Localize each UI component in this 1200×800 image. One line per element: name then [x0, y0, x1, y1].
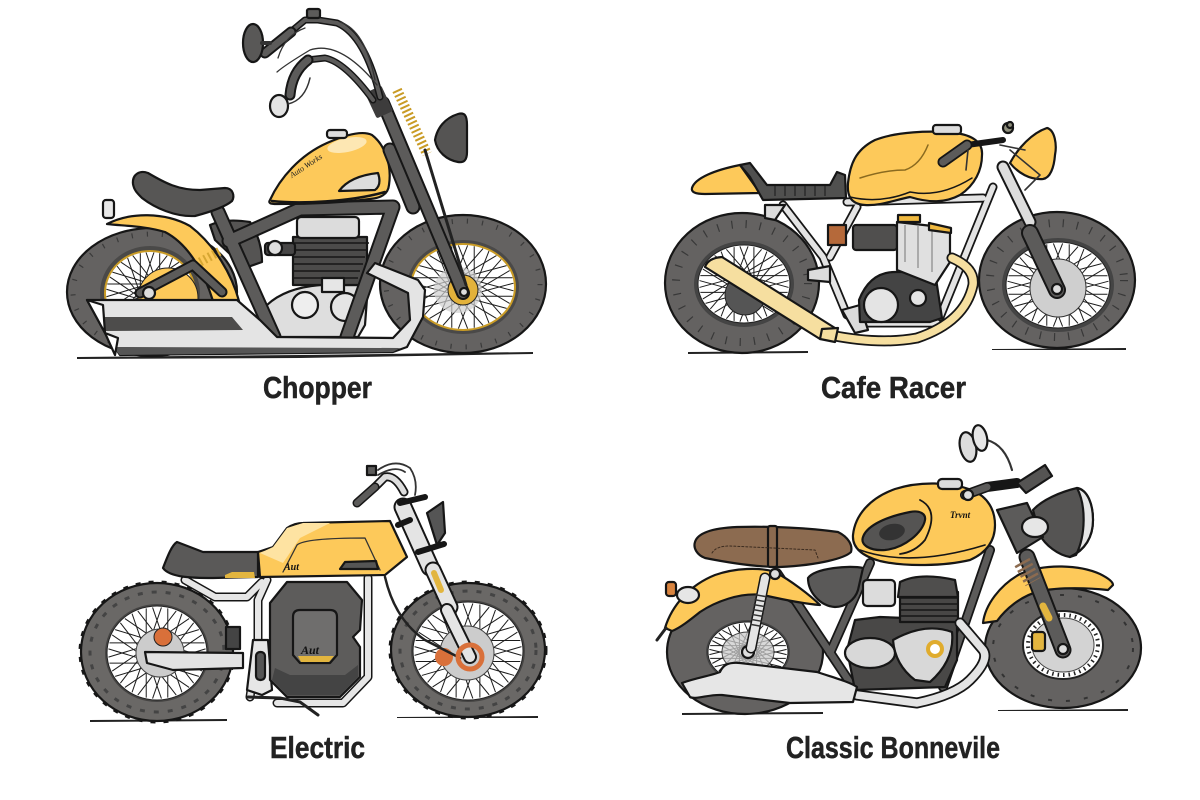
title: Electric: Electric: [270, 730, 365, 765]
front wheel: [985, 588, 1141, 708]
engine: [845, 576, 958, 690]
exhaust pipes: [87, 263, 425, 355]
handlebar: [357, 463, 416, 503]
seat: [163, 542, 258, 578]
tail light: [103, 200, 114, 218]
yellow tank: Aut: [283, 562, 300, 573]
front wheel: [390, 582, 546, 718]
front wheel: [380, 215, 546, 353]
rear wheel: [67, 228, 237, 356]
panel: electric motorcycle: [80, 463, 546, 722]
fuel tank: [853, 479, 995, 565]
tail lights: [657, 582, 699, 640]
engine: [265, 217, 369, 337]
rear fender: [107, 215, 239, 301]
front wheel: [979, 212, 1135, 348]
tail section: [692, 165, 760, 194]
frame: [777, 550, 990, 687]
swingarm and shock: [140, 250, 222, 299]
seat: [694, 526, 851, 567]
handlebars and mirrors: [243, 9, 380, 117]
frame: [218, 207, 393, 337]
rear wheel: [80, 582, 234, 722]
ground shadow: [90, 716, 538, 722]
panel: cafe racer motorcycle: [665, 122, 1135, 354]
ground shadow: [688, 348, 1126, 354]
cable: [385, 577, 460, 658]
yellow tank: [225, 521, 407, 578]
muffler and header pipe: [682, 623, 985, 703]
rear shock: [751, 569, 780, 648]
battery pack: Aut: [300, 643, 320, 657]
fuel tank: [269, 130, 390, 204]
ground shadow: [682, 709, 1128, 715]
ground shadow: [77, 352, 533, 359]
headlight: [435, 113, 467, 162]
title: Classic Bonnevile: Classic Bonnevile: [786, 730, 1000, 765]
fuel tank: [848, 125, 982, 205]
front fork: [398, 497, 482, 669]
gold exhaust: [705, 257, 973, 342]
front fender: [983, 566, 1113, 623]
battery pack: [270, 582, 362, 697]
panel: classic bonneville motorcycle: [657, 424, 1141, 715]
rear wheel: [665, 213, 819, 353]
battery frame: [185, 578, 368, 715]
side panel: [808, 567, 863, 607]
engine: [828, 215, 951, 322]
handlebar and mirrors: [957, 424, 1052, 500]
seat: [133, 172, 233, 216]
headlight: [1010, 128, 1056, 179]
seat: [740, 163, 846, 200]
swingarm: [145, 627, 243, 670]
title: Cafe Racer: Cafe Racer: [821, 370, 966, 405]
fuel tank: Auto Works: [287, 152, 324, 180]
front fork: [365, 86, 468, 296]
rear fender: [665, 569, 820, 631]
air box: [210, 221, 262, 268]
fork: [1003, 167, 1062, 294]
number plate: [427, 502, 445, 545]
rear wheel: [667, 590, 823, 714]
fuel tank: Trvnt: [950, 510, 971, 520]
title: Chopper: Chopper: [263, 370, 372, 405]
panel: chopper motorcycle: [67, 9, 546, 359]
headlight: [1033, 488, 1093, 557]
handlebar: [943, 122, 1040, 190]
frame: [765, 187, 993, 333]
front fork: [997, 503, 1068, 654]
